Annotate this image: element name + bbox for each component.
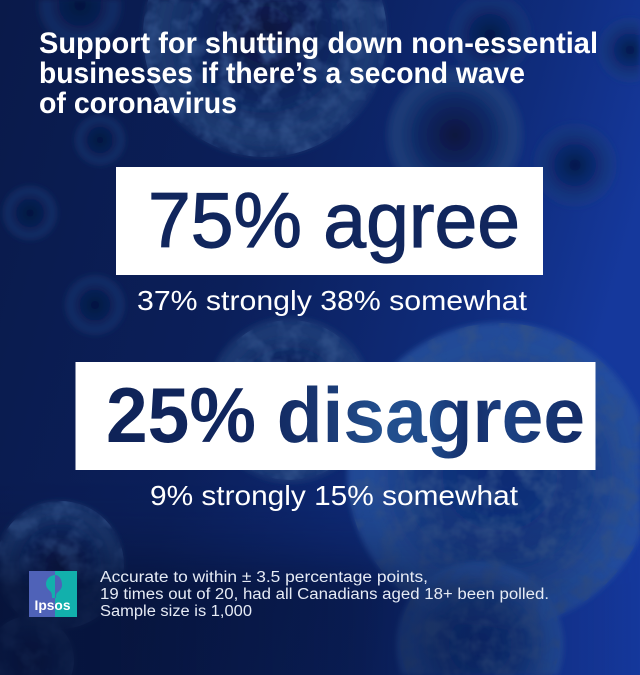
agree breakdown: 37% strongly 38% somewhat (137, 285, 527, 316)
panel: agree (116, 167, 543, 275)
title: businesses if there’s a second wave (39, 57, 525, 90)
disagree headline: 25% disagree (106, 371, 585, 459)
title: of coronavirus (39, 87, 237, 120)
footnote: 19 times out of 20, had all Canadians aged 18+ been polled. (100, 586, 549, 603)
logo wordmark: Ipsos (34, 598, 70, 613)
panel: disagree (76, 362, 596, 470)
disagree breakdown: 9% strongly 15% somewhat (150, 480, 518, 511)
title (39, 27, 598, 120)
icon: Ipsos logo (29, 571, 77, 617)
agree headline: 75% agree (148, 176, 520, 264)
footnote: Accurate to within ± 3.5 percentage points, (100, 569, 428, 586)
footnote: Sample size is 1,000 (100, 603, 252, 620)
title: Support for shutting down non-essential (39, 27, 598, 60)
footnote (100, 569, 549, 620)
